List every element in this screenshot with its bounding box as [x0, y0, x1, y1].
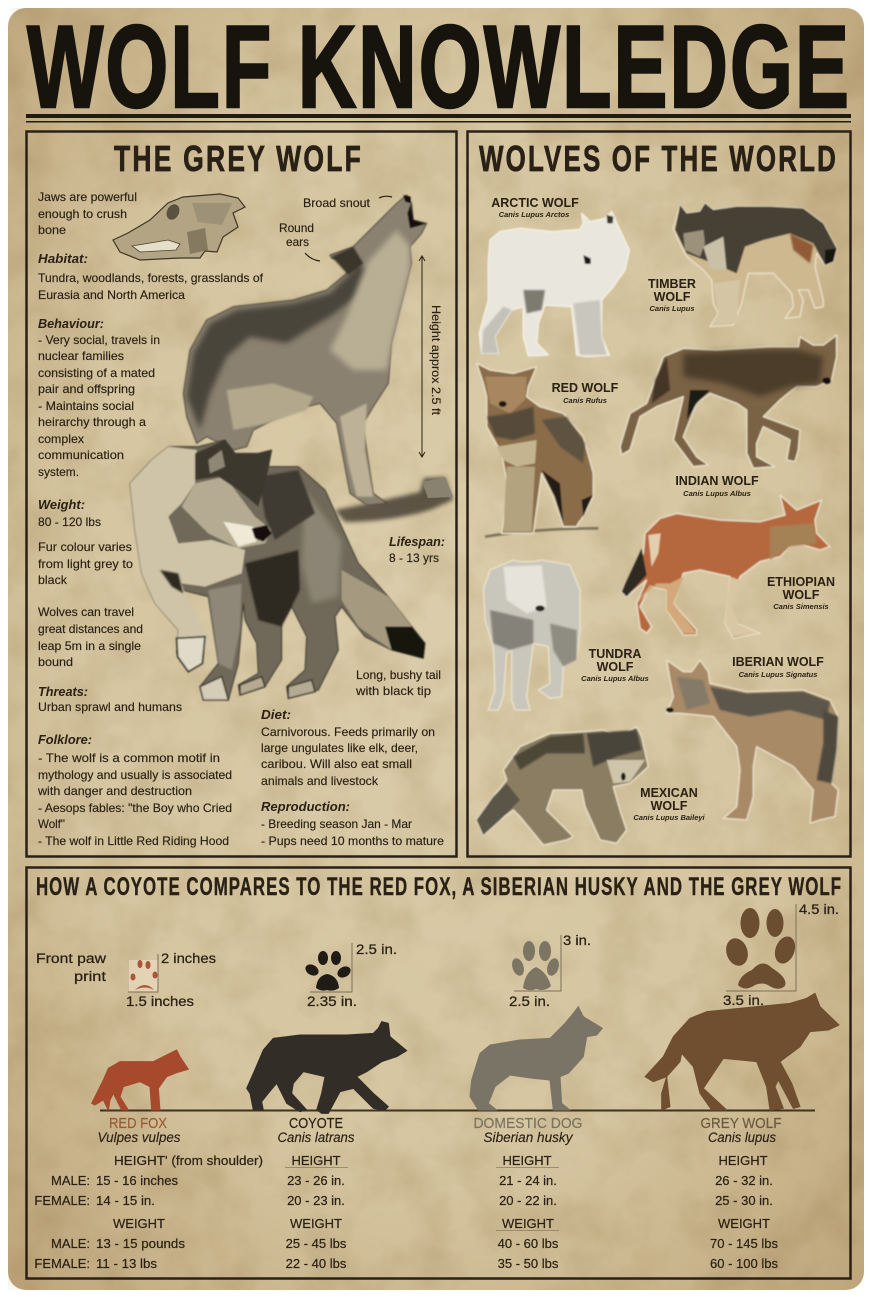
- silhouette: coyote: [247, 1022, 407, 1113]
- measurements: wolf paw: 4.5 in.: [799, 902, 839, 917]
- column: coyote: 25 - 45 lbs: [286, 1236, 347, 1251]
- label: front paw print: Front paw: [36, 951, 106, 966]
- left column text: Folklore:: [38, 732, 92, 747]
- measurements: wolf paw: [723, 902, 839, 1008]
- label: tundra wolf: Canis Lupus Albus: [581, 674, 649, 683]
- column: coyote: HEIGHT: [291, 1153, 341, 1168]
- column: coyote: Canis latrans: [278, 1130, 355, 1145]
- column: grey wolf: 70 - 145 lbs: [710, 1236, 778, 1251]
- label: timber wolf: [648, 277, 696, 313]
- label: iberian wolf: [732, 655, 824, 679]
- right column text: Long, bushy tail: [356, 668, 441, 682]
- label: arctic wolf: Canis Lupus Arctos: [499, 210, 569, 219]
- silhouette: red fox: [92, 1050, 188, 1110]
- left column text: - Aesops fables: "the Boy who Cried: [38, 801, 232, 815]
- measurements: coyote paw: [307, 942, 397, 1009]
- column: red fox: 13 - 15 pounds: [96, 1236, 186, 1251]
- left column text: complex: [38, 432, 84, 446]
- left column text: bound: [38, 655, 73, 669]
- column: red fox: MALE:: [51, 1236, 90, 1251]
- label: ethiopian wolf: ETHIOPIAN: [767, 575, 835, 589]
- right column text: animals and livestock: [261, 774, 379, 788]
- left column text: Tundra, woodlands, forests, grasslands of: [38, 271, 264, 285]
- wolf: tundra: [483, 560, 580, 710]
- column: red fox: MALE:: [51, 1173, 90, 1188]
- column: grey wolf: [700, 1115, 782, 1271]
- left column text: 80 - 120 lbs: [38, 515, 101, 529]
- column: grey wolf: GREY WOLF: [700, 1115, 782, 1132]
- label: iberian wolf: IBERIAN WOLF: [732, 655, 824, 669]
- left column text: mythology and usually is associated: [38, 768, 232, 782]
- column: red fox: WEIGHT: [113, 1216, 165, 1231]
- measurements: fox paw: 2 inches: [161, 951, 216, 966]
- label: mexican wolf: [633, 786, 706, 822]
- callouts: snout and ears: Broad snout: [303, 196, 371, 210]
- column: coyote: 20 - 23 in.: [287, 1193, 345, 1208]
- label: timber wolf: TIMBER: [648, 277, 696, 291]
- label: tundra wolf: WOLF: [597, 660, 634, 674]
- wolf: iberian: [666, 660, 838, 823]
- label: front paw print: [36, 951, 106, 984]
- column: grey wolf: 26 - 32 in.: [715, 1173, 773, 1188]
- label: indian wolf: [675, 474, 759, 498]
- label: iberian wolf: Canis Lupus Signatus: [739, 670, 817, 679]
- right column text: - Breeding season Jan - Mar: [261, 817, 412, 831]
- label: front paw print: print: [74, 969, 106, 984]
- wolf: ethiopian: [622, 495, 830, 638]
- column: domestic dog: 20 - 22 in.: [499, 1193, 557, 1208]
- icon: dog paw print: [510, 935, 561, 991]
- left column text: consisting of a mated: [38, 366, 155, 380]
- left column text: system.: [38, 465, 79, 479]
- wolf: arctic: [479, 212, 629, 357]
- label: tundra wolf: [581, 647, 649, 683]
- left column text: Behaviour:: [38, 316, 104, 331]
- left column text: with danger and destruction: [37, 784, 192, 798]
- left column text: Wolf": [38, 817, 65, 831]
- label: arctic wolf: [491, 196, 579, 219]
- label: indian wolf: INDIAN WOLF: [675, 474, 759, 488]
- column: grey wolf: 25 - 30 in.: [715, 1193, 773, 1208]
- callouts: snout and ears: Round: [279, 221, 314, 235]
- measurements: wolf paw: 3.5 in.: [723, 993, 764, 1008]
- column: domestic dog: WEIGHT: [502, 1216, 554, 1231]
- label: mexican wolf: MEXICAN: [640, 786, 698, 800]
- left column text: Weight:: [38, 497, 85, 512]
- icon: wolf skull: [113, 194, 245, 260]
- column: grey wolf: 60 - 100 lbs: [710, 1256, 778, 1271]
- label: timber wolf: Canis Lupus: [649, 304, 695, 313]
- icon: fox paw print: [128, 954, 158, 992]
- column: domestic dog: HEIGHT: [502, 1153, 552, 1168]
- measurements: dog paw: 3 in.: [563, 933, 591, 948]
- measurements: dog paw: 2.5 in.: [509, 994, 550, 1009]
- callouts: snout and ears: ears: [286, 235, 309, 249]
- column: red fox: RED FOX: [109, 1115, 167, 1132]
- label: mexican wolf: WOLF: [651, 799, 688, 813]
- right column text: Lifespan:: [389, 534, 445, 549]
- silhouette: domestic dog: [470, 1007, 602, 1110]
- left column text: communication: [38, 448, 124, 462]
- left column text: - The wolf is a common motif in: [38, 751, 220, 765]
- column: red fox: HEIGHT' (from shoulder): [114, 1153, 263, 1168]
- wolf: indian: [620, 335, 837, 468]
- column: red fox: FEMALE:: [34, 1256, 90, 1271]
- column: domestic dog: 21 - 24 in.: [499, 1173, 557, 1188]
- column: domestic dog: 40 - 60 lbs: [498, 1236, 559, 1251]
- wolf: mexican: [477, 727, 648, 845]
- column: grey wolf: HEIGHT: [718, 1153, 768, 1168]
- column: grey wolf: WEIGHT: [718, 1216, 770, 1231]
- heading: the grey wolf: THE GREY WOLF: [114, 138, 363, 179]
- height label: Height approx 2.5 ft: [429, 305, 443, 416]
- silhouette: grey wolf: [645, 993, 839, 1110]
- column: coyote: WEIGHT: [290, 1216, 342, 1231]
- left column text: - Maintains social: [38, 399, 134, 413]
- column: red fox: FEMALE:: [34, 1193, 90, 1208]
- column: coyote: COYOTE: [289, 1115, 343, 1132]
- right column text: [261, 534, 445, 848]
- label: ethiopian wolf: Canis Simensis: [773, 602, 829, 611]
- panel: wolves of the world: [468, 132, 850, 856]
- left column text: Eurasia and North America: [38, 288, 185, 302]
- left column text: black: [38, 573, 68, 587]
- column: grey wolf: Canis lupus: [708, 1130, 776, 1145]
- left column text: enough to crush: [38, 207, 127, 221]
- left column text: - Very social, travels in: [38, 333, 160, 347]
- column: red fox: 14 - 15 in.: [96, 1193, 155, 1208]
- icon: coyote paw print: [303, 943, 353, 992]
- column: domestic dog: Siberian husky: [484, 1130, 574, 1145]
- left column text: Threats:: [38, 684, 88, 699]
- measurements: dog paw: [509, 933, 591, 1009]
- column: domestic dog: [474, 1115, 582, 1271]
- left column text: heirarchy through a: [38, 415, 146, 429]
- wolf: timber: [673, 203, 837, 327]
- left column text: great distances and: [38, 622, 143, 636]
- wolf: red: [477, 363, 598, 537]
- column: red fox: Vulpes vulpes: [98, 1130, 181, 1145]
- height arrow: [419, 256, 425, 457]
- column: domestic dog: DOMESTIC DOG: [474, 1115, 582, 1132]
- title rule: [26, 114, 851, 122]
- label: arctic wolf: ARCTIC WOLF: [491, 196, 579, 210]
- label: ethiopian wolf: [767, 575, 835, 611]
- column: red fox: [34, 1115, 263, 1271]
- left column text: leap 5m in a single: [38, 639, 141, 653]
- left column text: Urban sprawl and humans: [38, 700, 182, 714]
- right column text: Reproduction:: [261, 799, 350, 814]
- right column text: caribou. Will also eat small: [261, 757, 412, 771]
- label: red wolf: Canis Rufus: [563, 396, 607, 405]
- left column text: Habitat:: [38, 251, 88, 266]
- column: coyote: 22 - 40 lbs: [286, 1256, 347, 1271]
- label: indian wolf: Canis Lupus Albus: [683, 489, 751, 498]
- left column text: Jaws are powerful: [38, 190, 137, 204]
- icon: wolf paw print: [723, 904, 799, 991]
- right column text: Carnivorous. Feeds primarily on: [261, 725, 435, 739]
- label: red wolf: RED WOLF: [552, 381, 619, 395]
- column: red fox: 15 - 16 inches: [96, 1173, 178, 1188]
- right column text: with black tip: [355, 684, 431, 698]
- callouts: snout and ears: [279, 196, 392, 261]
- measurements: coyote paw: 2.5 in.: [356, 942, 397, 957]
- left column text: from light grey to: [38, 557, 133, 571]
- left column text: - The wolf in Little Red Riding Hood: [38, 834, 229, 848]
- left column text: pair and offspring: [38, 382, 135, 396]
- panel: the grey wolf: [26, 132, 456, 856]
- right column text: large ungulates like elk, deer,: [261, 741, 418, 755]
- left column text: Wolves can travel: [38, 605, 134, 619]
- right column text: Diet:: [261, 707, 291, 722]
- column: domestic dog: 35 - 50 lbs: [498, 1256, 559, 1271]
- label: mexican wolf: Canis Lupus Baileyi: [633, 813, 706, 822]
- measurements: coyote paw: 2.35 in.: [307, 994, 357, 1009]
- right column text: - Pups need 10 months to mature: [261, 834, 444, 848]
- illustration: standing wolf: [130, 440, 425, 700]
- illustration: howling wolf: [183, 195, 453, 522]
- ground line: [100, 1110, 815, 1112]
- measurements: fox paw: [126, 951, 216, 1009]
- label: timber wolf: WOLF: [654, 290, 691, 304]
- left column text: bone: [38, 223, 66, 237]
- right column text: 8 - 13 yrs: [389, 551, 439, 565]
- label: red wolf: [552, 381, 619, 405]
- left column text: [37, 190, 264, 848]
- label: ethiopian wolf: WOLF: [783, 588, 820, 602]
- panel: coyote comparison: [26, 868, 850, 1278]
- label: tundra wolf: TUNDRA: [589, 647, 641, 661]
- column: coyote: [278, 1115, 355, 1271]
- column: coyote: 23 - 26 in.: [287, 1173, 345, 1188]
- left column text: Fur colour varies: [38, 540, 132, 554]
- left column text: nuclear families: [38, 349, 124, 363]
- measurements: fox paw: 1.5 inches: [126, 994, 194, 1009]
- column: red fox: 11 - 13 lbs: [96, 1256, 157, 1271]
